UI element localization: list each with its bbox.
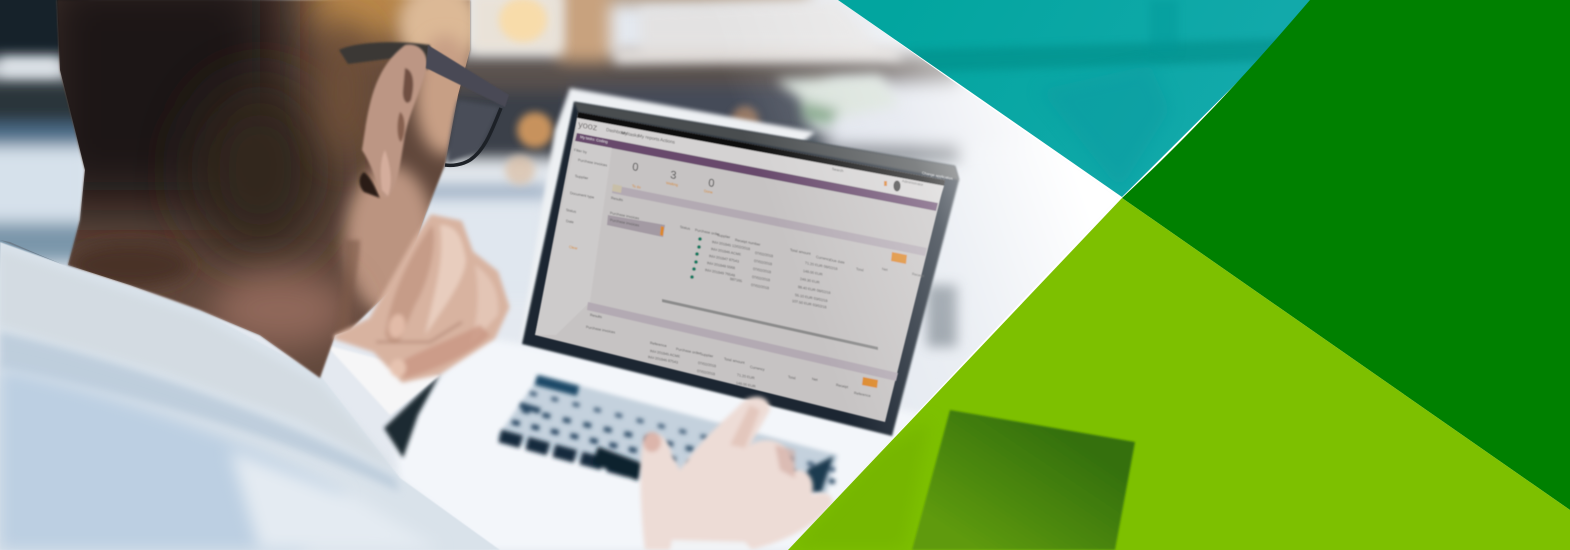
screen: interface text: 07/02/2018 [754,259,772,266]
screen: interface text: 88.40 EUR 08/02/18 [798,285,831,295]
screen: interface text: Actions [660,137,676,145]
screen: interface text: Purchase order [676,347,701,356]
screen: interface text: Purchase invoices [610,218,639,228]
screen: interface text: My tasks [621,130,640,138]
screen: interface text: yooz [578,119,598,133]
teal photo shadows [910,36,1276,74]
screen: interface text: Clear [569,245,578,251]
screen: interface text: Total amount [790,248,811,256]
screen: interface text: Purchase invoices [610,211,639,221]
laptop lid [520,88,959,436]
screen: interface text: Receipt [836,383,848,389]
screen: interface text: INV-201848 5568 [707,261,735,270]
screen: interface text: Status [566,208,576,214]
screen: buttons [891,252,907,264]
screen: interface text: Dashboard [606,127,629,136]
screen: interface text: Results [611,196,623,202]
photo: man working at laptop [0,0,1200,550]
screen: interface text: Date [566,219,574,224]
glasses [426,45,509,165]
screen: interface text: To do [632,184,641,190]
screen: interface text: INV-201849 76548 [705,268,735,278]
screen: interface text: 249.30 EUR [800,277,820,285]
screen: interface text: Results [590,313,602,319]
glasses temple behind ear [339,42,430,70]
screen: interface text: Currency [816,255,831,262]
light green panel [788,198,1570,550]
screen: interface text: INV-201847 87543 [709,254,739,264]
shaded shapes on green [788,410,1135,550]
screen: gray table bands [612,185,927,256]
screen: interface text: 148.00 EUR [736,381,756,389]
ear [360,44,427,198]
screen: interface text: INV-201846 87543 [648,355,678,365]
screen: interface text: Supplier [717,233,731,240]
laptop screen [535,112,953,422]
screen: interface text: My reports [638,133,660,142]
screen: interface text: Filter by [574,148,587,154]
screen: interface text: Document type [570,191,594,200]
screen: interface text: Due date [830,258,845,265]
man's head and neck [30,0,482,378]
screen: counters: 0 [708,177,715,190]
screen: interface text: 887165 [730,277,742,283]
laptop base and keyboard [384,335,960,550]
screen: interface text: Total [856,267,864,272]
screen: interface text: Reference [650,341,667,348]
screen: interface text: Net [882,267,888,272]
screen: interface text: 07/02/2018 [697,369,715,376]
screen: interface text: 07/02/2018 [755,251,773,258]
white fade over photo [748,0,1118,436]
screen: interface text: Currency [750,365,765,372]
screen: interface text: Net [812,377,818,382]
hand on chin [336,217,507,380]
screen: interface text [566,119,953,398]
screen: interface text: 107.50 EUR 03/02/18 [792,299,827,310]
dark green panel [1122,0,1570,510]
keyboard keys [500,380,835,490]
screen: interface text: Done [704,189,713,195]
photo background [0,0,1064,550]
screen: interface text: Total amount [724,357,745,365]
screen: interface text: 55.10 EUR 03/02/18 [795,293,828,303]
teal triangle [838,0,1320,197]
screen: status dots [690,237,702,279]
screen: interface text: Purchase invoices [586,325,615,335]
screen: interface text: Status [680,225,690,231]
screen: interface text: 07/02/2018 [751,283,769,290]
screen: interface text: Purchase invoices [578,158,607,168]
screen: interface text: Supplier [700,352,714,359]
screen: interface text: Receipt number [735,238,761,247]
screen: interface text: Receipt [912,272,924,278]
hand on keyboard [640,397,833,550]
screen: counters [632,162,715,188]
screen: interface text: INV-201846 ACME [711,247,742,257]
screen: interface text: 07/02/2018 [698,361,716,368]
screen: interface text: My tasks: Coding [580,135,608,144]
screen: interface text: INV-201845 12/02/2018 [712,240,750,251]
screen: interface text: 07/02/2018 [753,267,771,274]
screen: interface text: Change application [922,171,953,181]
screen: interface text: Supplier [575,174,589,181]
screen: user icon [893,180,901,192]
screen: interface text: Waiting [666,181,678,187]
screen: interface text: Reference [854,391,871,398]
screen: interface text: Search [832,167,843,173]
screen: interface text: Administrator [902,179,924,187]
screen: interface text: INV-201845 ACME [650,349,681,359]
screen: interface text: 07/02/2018 [752,275,770,282]
screen: counters: 0 [632,161,639,174]
screen: interface text: 71.20 EUR [737,373,755,380]
man's shirt [0,240,500,550]
screen: interface text: Total [788,375,796,380]
screen: interface text: 71.20 EUR 08/02/18 [805,261,838,271]
screen: counters: 3 [670,169,677,182]
screen: interface text: 148.00 EUR [803,269,823,277]
screen: interface text: Purchase order [695,228,720,237]
